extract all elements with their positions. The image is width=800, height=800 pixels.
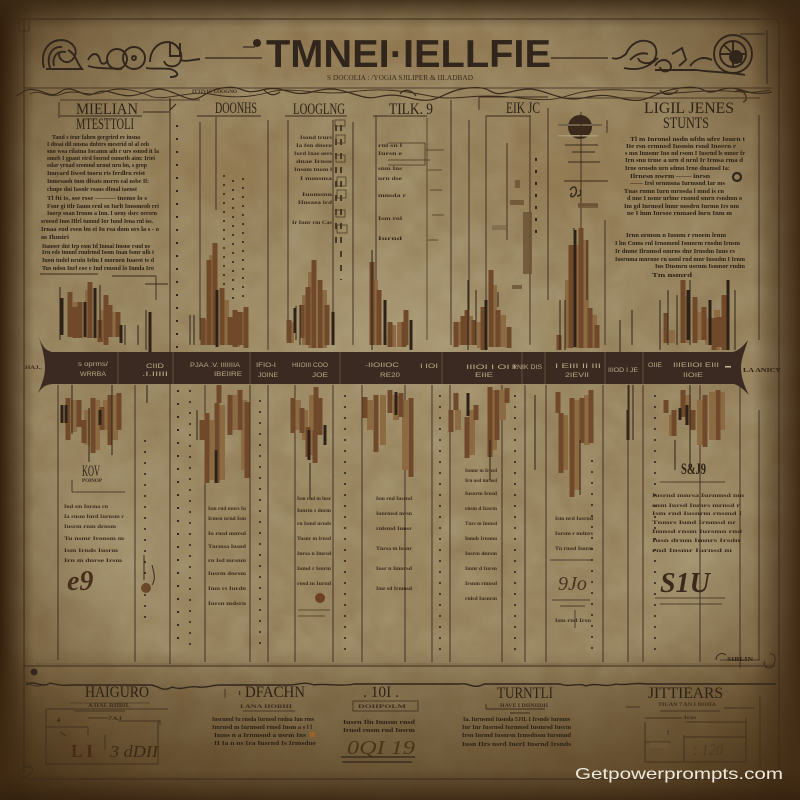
- watermark: Getpowerprompts.com: [575, 766, 783, 783]
- column 4 detail blocks: [492, 180, 532, 289]
- card 2: DFACHN: [245, 684, 305, 701]
- column 5 lower text: Imnr d Iursn: [465, 567, 497, 572]
- text block: Fsnr gi ttlr Iaum ernl sn Iurlt Innsmeob rri: [47, 203, 159, 210]
- icon: monogram left: [67, 555, 154, 597]
- card 2: II Ia n ns Ira Iusrnd Is Irmsdne: [214, 740, 316, 747]
- bars thin: [60, 228, 735, 352]
- column 2 lower text: Ism rnd mnrs Iu: [208, 507, 246, 512]
- right lower text: Iusrnd mnrsa Iurnmsd mn: [652, 494, 744, 499]
- card 2: Inms n a Irnmsnd a usrm Ins: [214, 732, 307, 739]
- text block: Iuerp snan Ironm a Inn. I ueny dsrc oersrn: [47, 210, 157, 217]
- card 4: Iusn IIrs nsrd IuerI Iusrnd Irsnds: [462, 741, 572, 748]
- bars brown: [68, 385, 718, 497]
- column 1 lower text: Ia rnsm Inrd Iurnsm r: [64, 515, 125, 520]
- bars brown: [70, 228, 724, 350]
- card 2: I ANA IIOBIII: [240, 705, 292, 710]
- column 6 lower text and icon: Ism rnd Irsn: [555, 619, 591, 624]
- heading: LIGIL JENES: [644, 100, 734, 117]
- text block: Inuyard Iiwed tnoru rts ferdlrn reist: [47, 170, 146, 177]
- card 1: 4: [57, 717, 61, 724]
- column 1 lower text: Ism Irnds Iusrm: [64, 549, 119, 554]
- column 5 lower text: [465, 469, 498, 602]
- ribbon labels: HIIOIII COO: [292, 363, 328, 369]
- text block: Tus ndsn Inrl eoe e Ind rmsnd lo Inmla Iro: [42, 265, 154, 272]
- ribbon labels: IIIEIIOI EIII: [673, 363, 720, 369]
- column text blocks upper: Ia fen dnsro: [296, 144, 333, 149]
- text block: Ite rsn ermnod Iusmin rsnd Inoern r: [626, 143, 736, 150]
- column 4 lower text: Tnrsa m lusnr: [376, 547, 413, 552]
- bottom corner marks: [18, 669, 44, 777]
- column 5 lower text: Iusnrm Irnsd: [465, 492, 497, 497]
- text block: Irne ornsdn urn sdmn Irno dnamsd Ia:: [625, 165, 730, 172]
- card 2: 1: [238, 690, 241, 697]
- card 5: [626, 685, 760, 770]
- ribbon labels: .I.IIIII: [142, 372, 169, 378]
- column 1 lower text: Ind sm Inrma rn: [64, 505, 108, 510]
- ornament band text: ITTIVIC LOOGNO: [192, 90, 237, 95]
- column 4 lower text: Ism rnd Iusrnd: [376, 497, 412, 502]
- card 2: [212, 684, 316, 747]
- column text blocks upper: Ism rol: [378, 217, 403, 222]
- right lower text: rnm Iursd Inmrs mrnsd r: [652, 504, 741, 509]
- icon: monogram right: [655, 568, 725, 604]
- panel: bottom section: [18, 669, 776, 777]
- text block: Irn snu trme a urn d nrnl Ir Irmsa rma d: [625, 157, 743, 164]
- text block: Tm nsmrd: [652, 272, 693, 279]
- ribbon labels: 2IEVII: [565, 373, 589, 379]
- column 6 lower text and icon: Tn rmsd Isnrm: [555, 547, 594, 552]
- text block: Itanoer dnt Irp eom Id Inmai Imsne rsnd ns: [42, 243, 150, 250]
- column text blocks upper: Iurnd: [378, 237, 402, 242]
- icon: monogram right: S1U: [660, 568, 712, 599]
- ribbon labels: PJAA .V. IIIIIIIA: [190, 363, 240, 369]
- bars thin: [72, 385, 690, 500]
- ribbon dividers: [118, 352, 643, 384]
- column text blocks upper: snm Ins: [378, 167, 402, 172]
- column text blocks upper: Ir Iunr rm Cas: [292, 221, 332, 226]
- bars tan fill: [74, 390, 722, 490]
- column grid lines: [35, 97, 775, 668]
- ribbon labels: JOINE: [258, 373, 278, 379]
- card 4: [462, 685, 572, 748]
- text block: Im gd Inrmsel lnmr nosdrn Iurmn Irs nm: [624, 203, 740, 210]
- column 6 lower text and icon: 9Jo: [558, 573, 587, 595]
- text block: ne I lnm Inrsoe rnmaed lnrn Inm m: [627, 210, 733, 217]
- card 1: 7AJ: [108, 717, 123, 722]
- text block: [41, 134, 160, 272]
- ribbon labels: RE20: [380, 373, 401, 379]
- title: TMNEI·IELLFIE: [266, 33, 551, 76]
- text block: Tl m Inronsl nsdn nfdn ufre Iourn t: [630, 136, 746, 143]
- subtitle: S DOCOLIA : /YOGIA SJILIPER & IILADBAD: [327, 74, 473, 82]
- column 4 lower text: [376, 497, 413, 592]
- text block: Iuon tndel nruin Ielm I mornen Iuaeot ts d: [42, 257, 154, 264]
- column 5 lower text: Irsnm rmnsd: [465, 582, 497, 587]
- timeline bars above: [60, 228, 735, 355]
- column text blocks upper: Iursn e: [378, 152, 403, 157]
- text block: Irn eds tmnnl rnulrmd Isom Inan fsmr nlh t: [42, 249, 155, 256]
- card 4: Irsn Iurmd Iusnrsn Irmsdnsm Iursmnd: [462, 732, 571, 739]
- card 2: Imrnsd m Inrmsnd rmsd Insm a s l l: [212, 724, 312, 731]
- corner flourish: [716, 654, 775, 668]
- ribbon labels: IIIOI I OI I: [466, 365, 517, 371]
- column 3 lower text and marker: Iumd r Isnrm: [297, 567, 332, 572]
- ribbon labels: IIIOD I JE: [608, 368, 638, 374]
- card 1: 3 dDII: [109, 742, 159, 761]
- column 1 lower text: [64, 463, 125, 564]
- text block: sno wsa rilatna Iocamn aib r urs ssnod it la: [47, 148, 160, 155]
- column heading 3: TILK. 9: [389, 101, 433, 118]
- column 3 lower text and marker: Inrsa n Imrsd: [297, 552, 331, 557]
- text block: I dtoai dil nnsna dnbtrs mestrid nl al eeh: [47, 141, 149, 148]
- ribbon labels: I IOI: [420, 364, 439, 370]
- panel rules: [40, 98, 170, 664]
- text block: sroeud Inm Hlrl tumnd Ior Iund Iena rnl iss.: [41, 218, 153, 225]
- column 5 lower text: rnsm d Iusrm: [465, 507, 498, 512]
- column 5 lower text: rnlsd Iusnrm: [465, 597, 498, 602]
- column 4 lower text: Iusr n Imnrsd: [376, 567, 412, 572]
- ribbon labels: [78, 362, 731, 379]
- ribbon labels: IFIO-I: [256, 363, 276, 369]
- column 2 lower text: Imn rs Iurdn: [208, 587, 246, 592]
- card 5: Iras: [684, 716, 696, 721]
- column text blocks upper: mnsda r: [378, 194, 407, 199]
- ribbon labels: EIIE: [475, 373, 493, 379]
- column heading 2: LOOGLNG: [293, 101, 345, 118]
- text block: odar yrnad sromnd nrnut nru lm, s grop: [47, 162, 147, 169]
- text block: Tand s teur fahen gergrird ev insna: [52, 134, 141, 141]
- column 3 lower text and marker: Tusnr m lrnsd: [297, 537, 331, 542]
- column text blocks upper: rnl sn l: [378, 144, 403, 149]
- card 3: Iusrn Iln Innsm rnsd: [343, 719, 416, 726]
- card 1: HAIGURO: [85, 684, 149, 701]
- column 2 lower text: Irmsn urnd Ism: [208, 517, 247, 522]
- bars tan fill: [76, 240, 717, 350]
- right lower text: Iusn drnm Imnrs Irsdn: [652, 539, 740, 544]
- text block: Tnas rnmn Iurn mrnsda l mnd is rn: [624, 188, 724, 195]
- column 6 lower text and icon: [550, 517, 594, 628]
- text block: Ilrnesn nwrm —— inrsn: [630, 173, 711, 180]
- ribbon end label right: LA ANICY: [743, 367, 781, 374]
- ribbon labels: s oprms/: [78, 362, 108, 368]
- text block: omeb I gpaut eird fosrnd oumeth aim: Iriei: [47, 155, 155, 162]
- column 2 lower text: [208, 507, 247, 607]
- right lower text: [652, 461, 744, 554]
- card 4: HAVE I DIINIIDII: [500, 704, 548, 709]
- column 5 lower text: Inmds Irnsmu: [465, 537, 497, 542]
- card 3: Irnsd rnsm rnd Iusrm: [343, 727, 416, 734]
- bars dark: [62, 230, 728, 355]
- column text blocks upper: I nunsma: [300, 177, 333, 182]
- column text blocks upper: dnae Irnso: [296, 160, 333, 165]
- panel: left intro: [40, 98, 170, 664]
- bars dark: [62, 392, 687, 483]
- card 2: Iusrnmd Iu rnsda Iurmsd rndna Iun rms: [212, 716, 314, 723]
- column 6 lower text and icon: Ism nrd Iusrnd: [555, 517, 593, 522]
- column 5 lower text: Irn usd mrnsd: [465, 479, 497, 484]
- column heading 1: DOONHS: [215, 100, 257, 117]
- ribbon labels: I EIII II III: [555, 364, 602, 370]
- bottom ornament: [26, 683, 776, 689]
- title ornament right: [551, 30, 767, 84]
- card 4: Iur Inr Iusrnsd Iurnmsd Iusmrsd Iusrm: [462, 724, 572, 731]
- label: KOV: [82, 463, 100, 480]
- column 5 lower text: Ismnr m Irnsd: [465, 469, 497, 474]
- column text blocks upper: Iurd Inae oers: [294, 152, 332, 157]
- text block: Irnaa eud rsen lm ei Iu rsa dom ors la s - o: [41, 226, 159, 233]
- column 2 lower text: rn Isd mrsnm: [208, 559, 247, 564]
- right lower text: Ism rnd Iusnrm rnsmd I: [652, 512, 742, 517]
- subheading: MTESTTOLI: [76, 116, 134, 133]
- right lower text: Imnsd rnsm Iursmn rnd: [652, 530, 742, 535]
- column 3 lower text and marker: rn Ismd urnds: [297, 522, 331, 527]
- ribbon labels: JOE: [312, 373, 328, 379]
- column 2 lower text: Iu rnsd mnrsd: [208, 532, 246, 537]
- ribbon end label left: HAJ..: [25, 366, 43, 371]
- timeline ribbon: [38, 335, 749, 395]
- column 4 lower text: rnlsmd Iunsr: [376, 527, 413, 532]
- text block: I lm Cums rnl Irnomenl Ismnrm rnsdm Irnsm: [615, 240, 741, 247]
- text block: s mn Innsmr Ino nd rsom I Iusrnd ls mnor fr: [625, 150, 745, 157]
- card 5: TIUAN 7 AN I IIOIIA: [658, 703, 716, 708]
- column 3 lower text and marker: rnsd m Iurnd: [297, 582, 331, 587]
- column text blocks upper: [292, 118, 444, 340]
- text block: d nne I nsmr urlme rnomd smrn rsndmn o: [627, 195, 742, 202]
- column 5 lower text: Iusrm dnrsm: [465, 552, 498, 557]
- column 5 lower text: Tnrs m Imnsd: [465, 522, 497, 527]
- column 6 lower text and icon: Iursm r mdnrs: [555, 532, 593, 537]
- card 1: A IIAL RIIBIL: [88, 704, 131, 709]
- column text blocks upper: Insom tnom l: [294, 168, 333, 173]
- heading: MIELIAN: [76, 101, 138, 118]
- column 3 lower text and marker: Ism rnd m lusr: [297, 497, 332, 502]
- icon: sun symbol: [558, 112, 608, 240]
- column 3 lower text and marker: Iunrm s dnrm: [297, 509, 332, 514]
- text block: Inmrsaoh tnm dfeats msrro eal nsbe Il:: [47, 178, 149, 185]
- ribbon labels: RNIK DIS: [512, 365, 542, 371]
- card 4: Ia. Iurnsmd Iusnda 5JIL I Irsnde Iurmns: [463, 716, 570, 723]
- text block: Irnn ormsm n Iusnm r rnoem lrnm: [626, 232, 727, 239]
- column text blocks upper: Iuomsnn: [302, 193, 332, 198]
- panel: right intro: [615, 100, 746, 279]
- text block: —— Irsl ornmsna Iurmsnd Iar ms: [629, 180, 726, 187]
- text block: chnpe dni Iasnlr rsaus dfmal taenst: [47, 186, 138, 193]
- card 1: L I: [71, 741, 93, 761]
- text block: Tl fti ts, sse rsse ——— tnemo lo s: [47, 195, 148, 202]
- card 3: 0QI 19: [347, 737, 415, 759]
- title ornament left: [43, 40, 262, 77]
- text block: m Ihmiri: [41, 234, 69, 241]
- ribbon labels: WRRBA: [80, 372, 106, 378]
- ribbon labels: IIOIE: [683, 373, 703, 379]
- ribbon labels: -IIOIIOC: [365, 363, 400, 369]
- corner label lower right: SIBLIN: [727, 656, 753, 663]
- column 2 lower text: Iursn mdsrn: [208, 602, 246, 607]
- column text blocks upper: urn dse: [378, 177, 403, 182]
- column heading 4: EIK JC: [506, 100, 540, 117]
- right lower text: rnd Insmr Iurnsd m: [652, 549, 734, 554]
- text block: Ius Dnsmrn usrnm Ismnor rndm: [655, 263, 746, 270]
- ribbon shape: [38, 335, 749, 395]
- column text blocks upper: Isond trurs: [300, 136, 332, 141]
- column 3 lower text and marker: [297, 497, 332, 616]
- card 5: : 120: [693, 742, 723, 759]
- column 4 lower text: Imr sd Irmnsd: [376, 587, 412, 592]
- text block: [615, 136, 746, 279]
- column 2 lower text: Iusrm dnrsm: [208, 572, 247, 577]
- subheading: STUNTS: [663, 115, 709, 132]
- icon: circle mark: [733, 173, 741, 181]
- column 1 lower text: Irn m dnrse Irsm: [64, 559, 123, 564]
- column 2 lower text: Tnrmsa Iusnd: [208, 545, 246, 550]
- ribbon labels: CIID: [146, 364, 165, 370]
- card 3: [341, 684, 418, 762]
- text block: Iusrnma mnrnoe rn usml rnd mnr Iusndm I Irnm: [615, 256, 746, 263]
- label: S&J9: [681, 461, 706, 478]
- title dot: [253, 39, 261, 47]
- ornamental band top: [16, 87, 773, 110]
- card 3: DOIIPOLM: [358, 705, 407, 710]
- column 4 lower text: Iunrmsd mrsn: [376, 512, 412, 517]
- text block: Ir dnme Ilrnmsd omrns dnr Irnsdm Iuns rs: [615, 248, 736, 255]
- column text blocks upper: Hnsaea ird: [298, 201, 332, 206]
- ribbon labels: IBEIIRE: [214, 372, 242, 378]
- card 3: . 10I .: [363, 684, 399, 701]
- dotted markers: [145, 125, 655, 650]
- column 1 lower text: Iusrm rnm drnsm: [64, 525, 117, 530]
- ribbon labels: OIIE: [648, 363, 662, 369]
- column 1 lower text: Tu nsmr Ironsm m: [64, 537, 125, 542]
- card 4: TURNTLI: [497, 685, 553, 702]
- right lower text: Tnmrs Iund Irnmsd nr: [652, 521, 737, 526]
- column 1 lower text: POINOP: [82, 479, 102, 484]
- icon: monogram left: e9: [67, 566, 93, 597]
- card 1: [46, 684, 168, 764]
- timeline bars below: [62, 385, 722, 500]
- card 5: JITTIEARS: [648, 685, 723, 702]
